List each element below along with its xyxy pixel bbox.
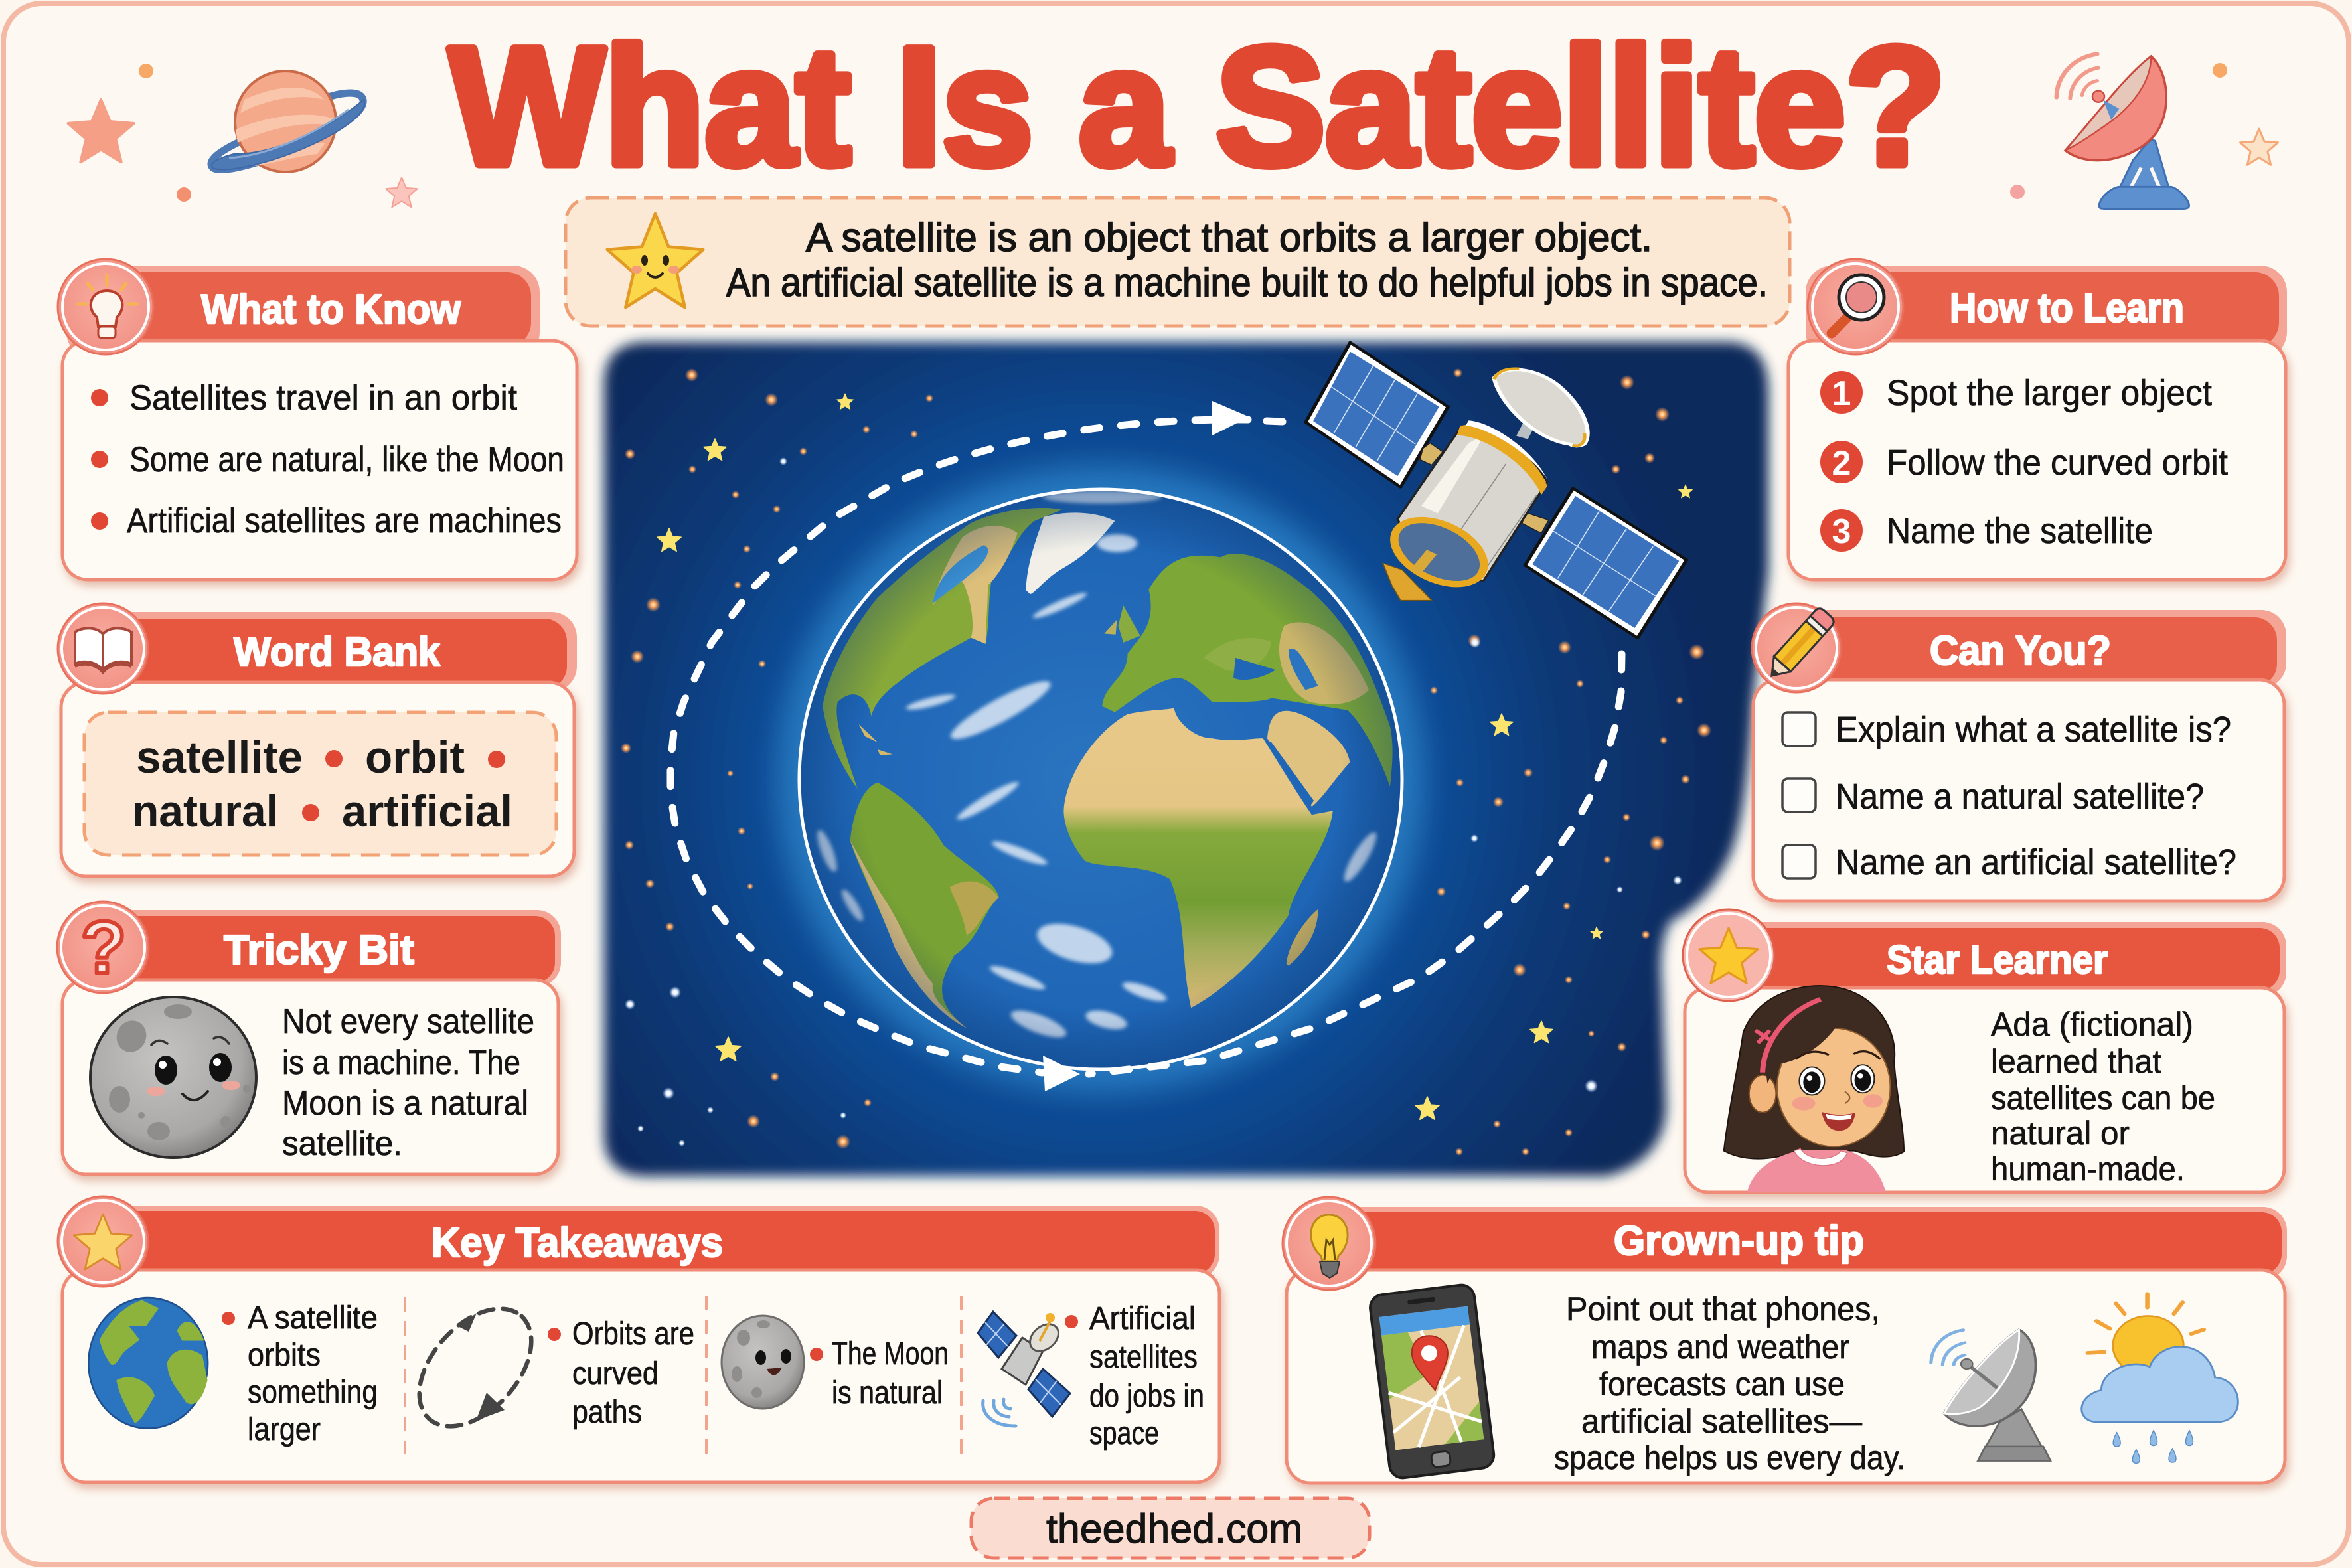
checklist: Explain what a satellite is?	[1836, 710, 2231, 749]
steps: 2	[1832, 444, 1851, 483]
text: satellites can be	[1991, 1079, 2215, 1117]
icon: Earth	[777, 466, 1425, 1093]
icon: pencil	[1752, 603, 1841, 692]
panel: Key Takeaways	[58, 1196, 1219, 1482]
heading: Tricky Bit	[224, 927, 414, 973]
steps: Spot the larger object	[1887, 373, 2212, 413]
text: Ada (fictional)	[1991, 1006, 2193, 1043]
icon: smiling Moon	[90, 997, 256, 1158]
word box: natural	[132, 786, 278, 836]
takeaway: the Moon: is natural	[832, 1375, 943, 1411]
icon: small Earth	[88, 1298, 208, 1429]
list: Some are natural, like the Moon	[129, 440, 564, 479]
panel: Can You?	[1752, 603, 2286, 901]
icon: gold star	[1683, 909, 1774, 1001]
continents	[823, 508, 1062, 789]
text: is a machine. The	[282, 1044, 520, 1082]
text: human-made.	[1991, 1150, 2185, 1188]
panel: How to Learn	[1788, 259, 2287, 580]
icon: ringed planet	[211, 71, 364, 172]
orbit arrows	[1043, 401, 1249, 1091]
text	[282, 1002, 534, 1163]
intro text	[726, 215, 1768, 305]
icon: decorative star and dots right	[2010, 63, 2278, 199]
takeaway: curved paths: paths	[572, 1395, 642, 1430]
word box	[84, 712, 556, 855]
text	[1991, 1006, 2215, 1188]
text: Point out that phones,	[1566, 1291, 1880, 1328]
panel: Tricky Bit	[57, 902, 561, 1174]
heading: Star Learner	[1887, 937, 2108, 982]
intro text: A satellite is an object that orbits a larger object.	[806, 215, 1652, 260]
icon: decorative stars and dots left	[68, 64, 418, 207]
list	[91, 378, 564, 540]
panel: What to Know	[58, 259, 577, 580]
background stars	[621, 368, 1711, 1156]
takeaway: the Moon: The Moon	[832, 1336, 949, 1372]
checklist: Name a natural satellite?	[1836, 777, 2204, 817]
icon: yellow bulb	[1283, 1197, 1375, 1290]
intro text: An artificial satellite is a machine built to do helpful jobs in space.	[726, 260, 1768, 305]
steps	[1820, 371, 2228, 552]
panel: Grown-up tip	[1283, 1197, 2287, 1483]
icon: small Moon	[722, 1316, 804, 1409]
heading: Can You?	[1930, 628, 2111, 674]
takeaway: satellite orbits	[88, 1298, 378, 1447]
word box: orbit	[365, 732, 465, 783]
text: Moon is a natural	[282, 1084, 528, 1123]
takeaway: satellite orbits: orbits	[248, 1338, 321, 1373]
takeaway: curved paths: curved	[572, 1356, 659, 1391]
word box: satellite	[136, 732, 303, 783]
takeaway: satellite orbits: larger	[248, 1412, 321, 1447]
heading: What to Know	[201, 287, 461, 333]
text: satellite.	[282, 1125, 402, 1163]
yellow stars	[657, 394, 1692, 1119]
list: Satellites travel in an orbit	[129, 378, 517, 418]
takeaway: artificial satellites	[978, 1301, 1204, 1451]
icon: smiling star	[607, 214, 703, 307]
steps: Follow the curved orbit	[1887, 443, 2228, 483]
icon: sun, cloud and rain	[2082, 1294, 2238, 1463]
icon: phone with map	[1369, 1283, 1495, 1480]
takeaway: artificial satellites: satellites	[1089, 1340, 1198, 1375]
checklist: Name an artificial satellite?	[1836, 842, 2236, 882]
icon: satellite	[1306, 343, 1687, 638]
heading: Word Bank	[234, 629, 440, 675]
panel: space illustration	[604, 342, 1768, 1176]
icon: grey dish	[1931, 1330, 2051, 1461]
heading: Grown-up tip	[1614, 1218, 1864, 1264]
icon: question mark: ?	[81, 906, 126, 989]
takeaway: the Moon	[722, 1316, 949, 1411]
steps: 3	[1832, 512, 1851, 551]
title: What Is a Satellite?	[449, 13, 1946, 200]
checklist	[1782, 710, 2236, 882]
text: space helps us every day.	[1554, 1439, 1905, 1476]
illustration: girl Ada	[1724, 986, 1904, 1192]
icon: pink satellite dish	[2057, 54, 2189, 209]
list: Artificial satellites are machines	[127, 501, 562, 540]
heading: Key Takeaways	[431, 1220, 723, 1266]
takeaway: artificial satellites: do jobs in	[1089, 1379, 1204, 1414]
takeaway: artificial satellites: Artificial	[1089, 1301, 1196, 1336]
word box: artificial	[342, 786, 512, 836]
icon: magnifying glass	[1808, 259, 1903, 354]
text: learned that	[1991, 1043, 2161, 1080]
clouds	[813, 491, 1381, 1043]
icon: dashed orbit	[398, 1288, 553, 1447]
steps: 1	[1832, 374, 1851, 413]
space background	[604, 342, 1768, 1176]
icon: open book	[58, 603, 148, 694]
icon: small satellite	[978, 1312, 1070, 1426]
panel: Word Bank	[58, 603, 577, 876]
takeaway: curved paths	[398, 1288, 694, 1447]
footer badge	[971, 1498, 1370, 1558]
text: forecasts can use	[1599, 1366, 1845, 1403]
takeaway: satellite orbits: A satellite	[248, 1300, 378, 1336]
heading: How to Learn	[1950, 285, 2184, 331]
text: Not every satellite	[282, 1002, 534, 1041]
text: natural or	[1991, 1115, 2130, 1152]
text: artificial satellites—	[1581, 1403, 1862, 1440]
steps: Name the satellite	[1887, 511, 2153, 551]
icon: light bulb	[58, 259, 153, 354]
takeaway: artificial satellites: space	[1089, 1416, 1159, 1451]
text: maps and weather	[1591, 1328, 1849, 1366]
text	[1554, 1291, 1905, 1476]
icon: star	[58, 1196, 148, 1287]
takeaway: curved paths: Orbits are	[572, 1316, 694, 1352]
panel: Star Learner	[1683, 909, 2286, 1192]
takeaway: satellite orbits: something	[248, 1375, 378, 1410]
orbit path	[670, 420, 1622, 1074]
intro banner	[566, 198, 1790, 326]
footer badge: theedhed.com	[1046, 1506, 1302, 1552]
icon: question mark	[57, 902, 149, 993]
